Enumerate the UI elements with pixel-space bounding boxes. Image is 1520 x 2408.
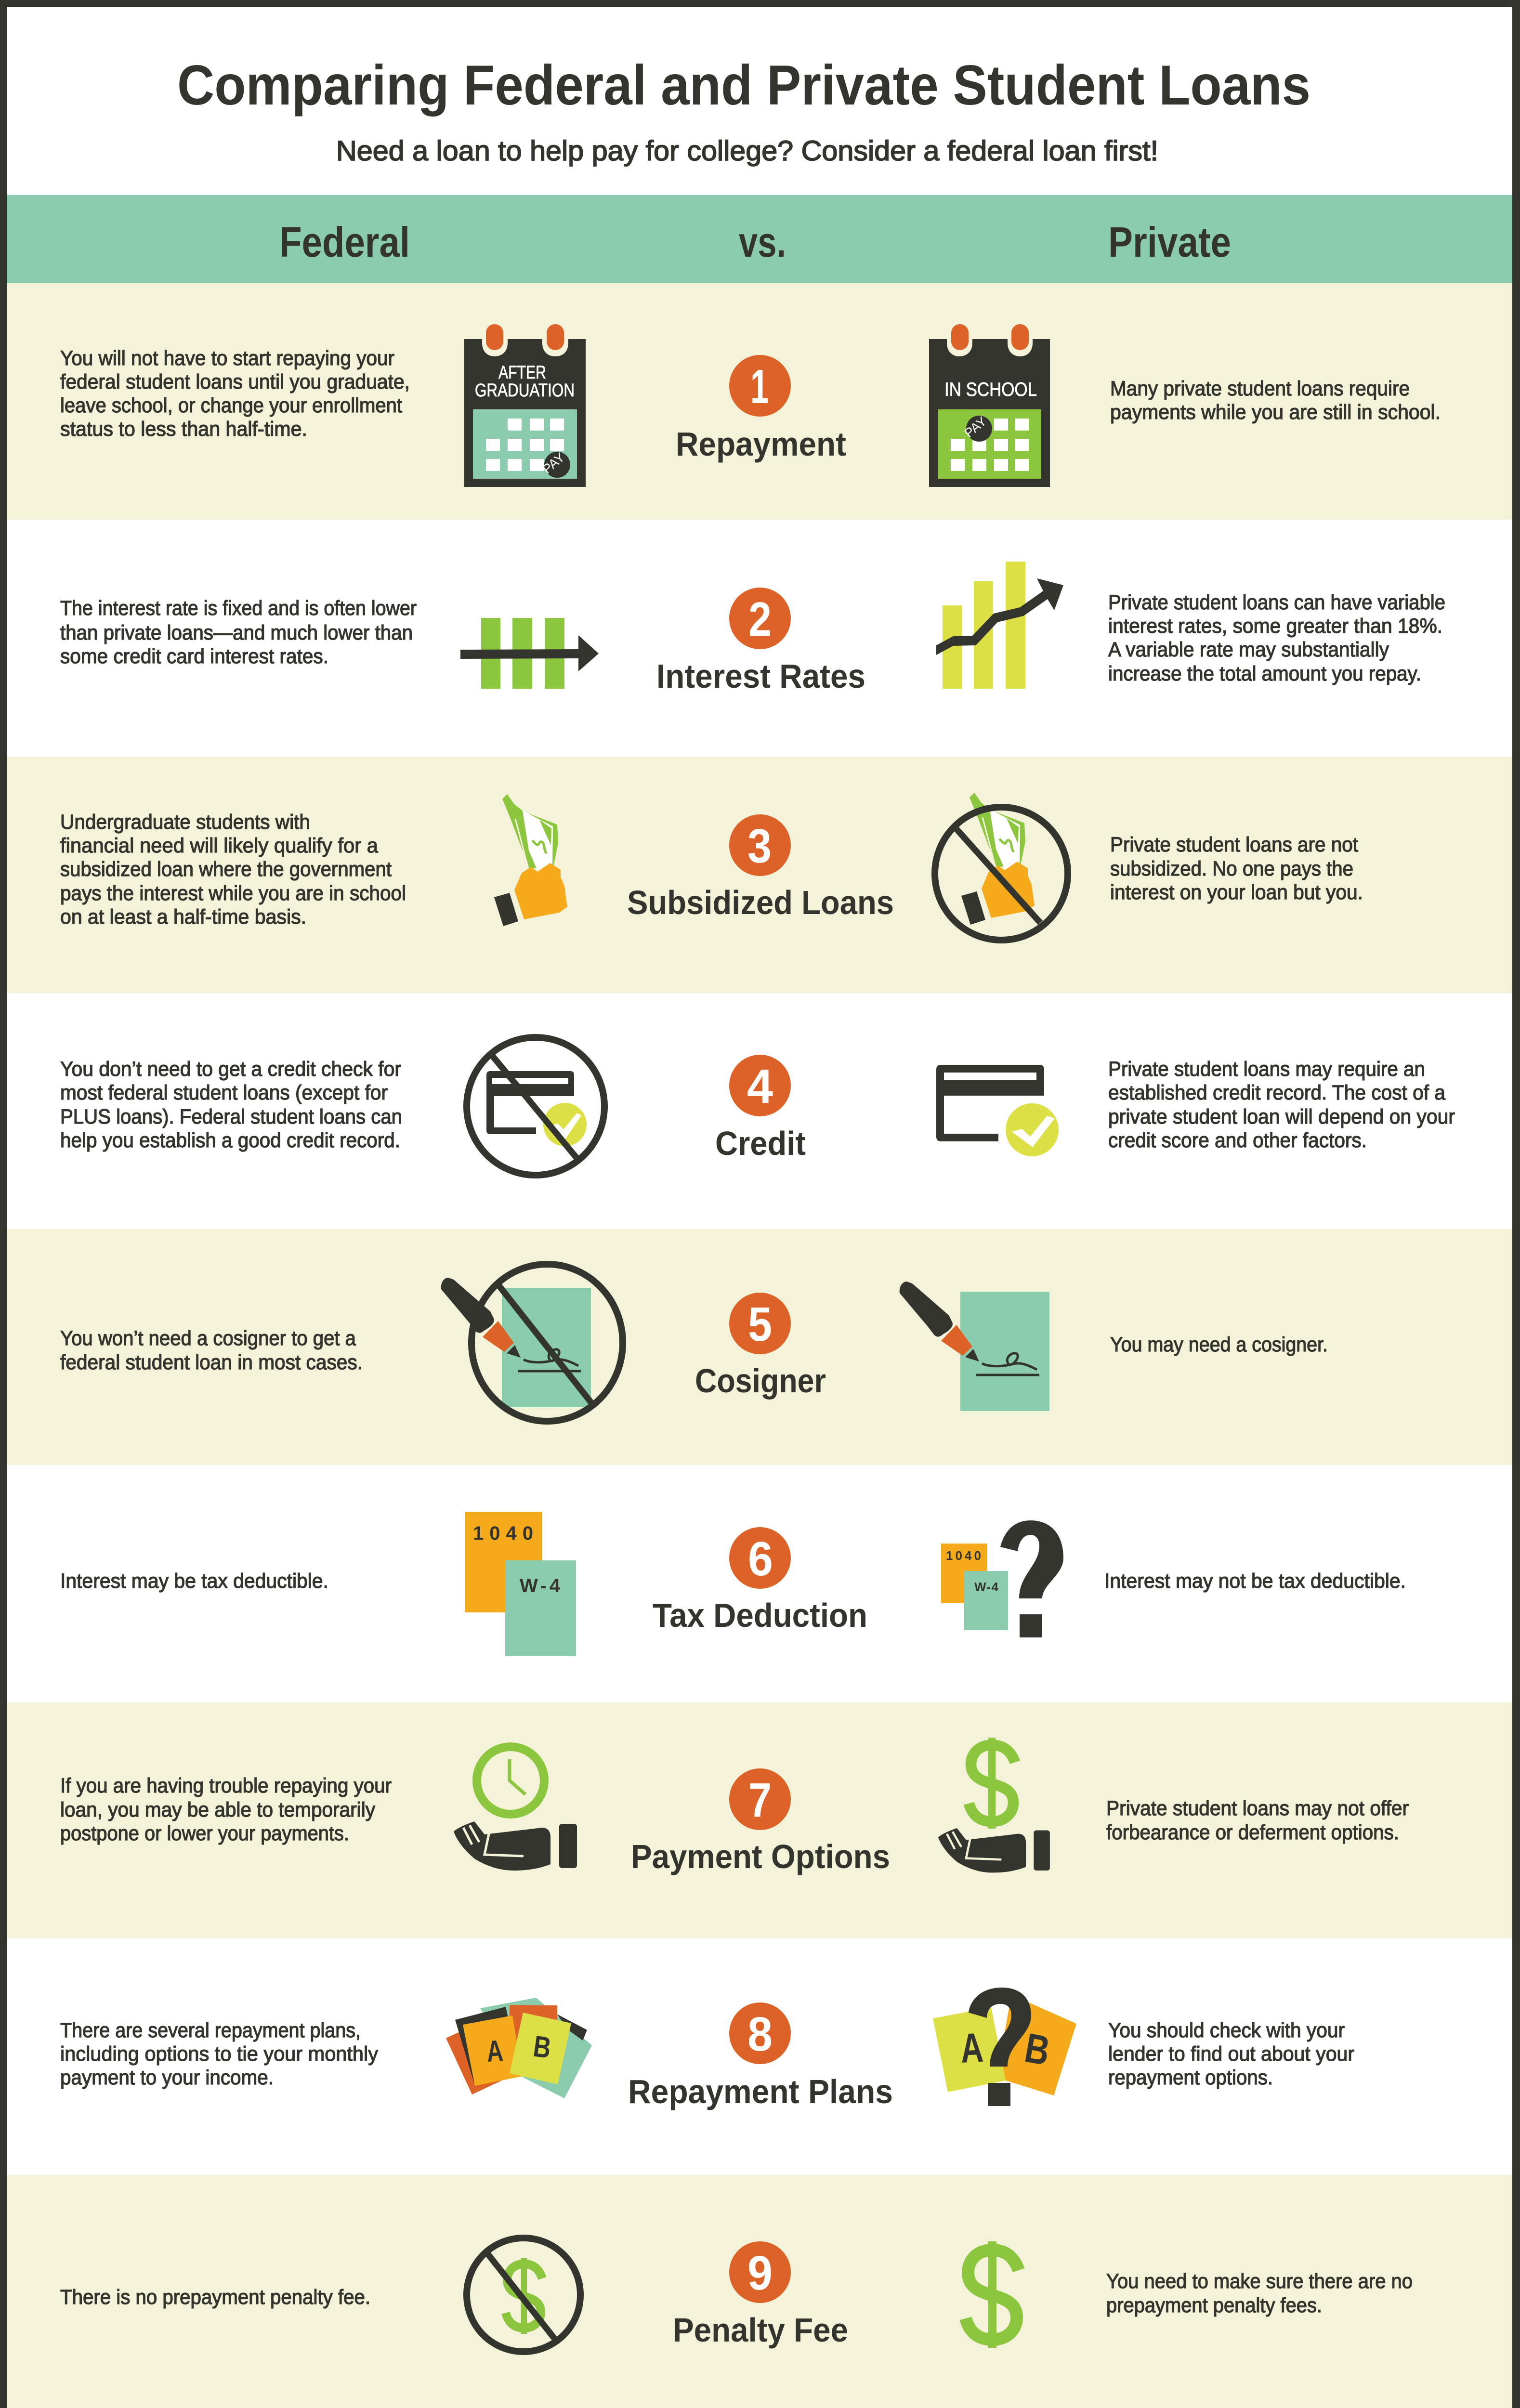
text: federal interest rates: than private loans—and much lower than xyxy=(60,621,413,644)
text: private repayment plans xyxy=(1108,2019,1354,2089)
text: private payment options: forbearance or deferment options. xyxy=(1106,1821,1399,1844)
icon: calendar after graduation: GRADUATION xyxy=(475,380,575,401)
icon: calendar in school: IN SCHOOL xyxy=(944,379,1037,400)
text: private interest rates: increase the total amount you repay. xyxy=(1108,662,1421,685)
text: private repayment plans: repayment options. xyxy=(1108,2066,1273,2089)
text: federal interest rates xyxy=(60,597,417,668)
header band: Federal vs. Private xyxy=(7,195,1512,283)
text: private repayment: payments while you are still in school. xyxy=(1110,401,1441,424)
step number 5: 5 xyxy=(748,1297,772,1351)
text: private repayment: Many private student loans require xyxy=(1110,377,1410,400)
icon: plan cards with question mark: A xyxy=(959,2025,984,2072)
step number 4: 4 xyxy=(747,1060,773,1113)
icon: dollar in hand xyxy=(938,1738,1050,1872)
icon: hand holding money xyxy=(494,794,567,926)
text: federal credit xyxy=(60,1058,402,1152)
label: penalty fee: Penalty Fee xyxy=(673,2311,848,2349)
text: federal credit: most federal student loans (except for xyxy=(60,1081,388,1104)
step number 4 xyxy=(729,1055,791,1116)
text: federal cosigner: You won’t need a cosigner to get a xyxy=(60,1327,356,1350)
text: federal interest rates: some credit card interest rates. xyxy=(60,645,328,668)
subtitle: Need a loan to help pay for college? Consider a federal loan first! xyxy=(336,135,1158,167)
panel: row 1 repayment xyxy=(7,283,1512,520)
title: Comparing Federal and Private Student Loans xyxy=(177,53,1310,117)
icon: rising arrow over bars xyxy=(936,562,1063,689)
text: private penalty fee: prepayment penalty fees. xyxy=(1106,2294,1322,2317)
icon: calendar after graduation xyxy=(464,324,586,487)
text: federal payment options: If you are having trouble repaying your xyxy=(60,1774,392,1797)
icon: prohibited pen signing xyxy=(441,1264,623,1421)
text: federal repayment: leave school, or change your enrollment xyxy=(60,394,402,417)
header band: Federal vs. Private: Federal xyxy=(279,218,410,266)
step number 8: 8 xyxy=(747,2007,773,2061)
text: federal subsidized: pays the interest while you are in school xyxy=(60,882,406,905)
text: private payment options xyxy=(1106,1797,1409,1844)
text: private repayment plans: lender to find out about your xyxy=(1108,2042,1354,2066)
label: subsidized loans: Subsidized Loans xyxy=(627,884,894,921)
text: federal credit: help you establish a good credit record. xyxy=(60,1129,400,1152)
step number 2: 2 xyxy=(748,592,772,646)
step number 8 xyxy=(729,2002,791,2064)
panel: row 9 penalty fee xyxy=(7,2175,1512,2408)
text: federal payment options: postpone or lower your payments. xyxy=(60,1822,349,1845)
text: private repayment xyxy=(1110,377,1441,424)
panel: row 5 cosigner xyxy=(7,1229,1512,1465)
text: federal repayment plans: payment to your income. xyxy=(60,2066,274,2089)
text: private interest rates xyxy=(1108,591,1445,685)
text: federal repayment plans: including options to tie your monthly xyxy=(60,2042,378,2066)
text: private credit: Private student loans may require an xyxy=(1108,1058,1425,1081)
text: federal repayment plans: There are several repayment plans, xyxy=(60,2019,361,2042)
text: federal credit: PLUS loans). Federal student loans can xyxy=(60,1105,402,1128)
text: private credit xyxy=(1108,1058,1455,1152)
icon: tax forms: W-4 xyxy=(520,1575,561,1597)
text: federal repayment plans xyxy=(60,2019,378,2089)
text: private subsidized: interest on your loan but you. xyxy=(1110,881,1363,904)
icon: plan cards with question mark xyxy=(933,1988,1076,2106)
step number 9: 9 xyxy=(747,2246,773,2300)
step number 1: 1 xyxy=(750,360,769,414)
text: private tax: Interest may not be tax deductible. xyxy=(1104,1570,1406,1593)
icon: calendar in school: PAY xyxy=(962,414,989,441)
panel: row 8 repayment plans xyxy=(60,1988,1354,2110)
icon: prohibited credit card xyxy=(467,1037,604,1175)
text: private subsidized: subsidized. No one pays the xyxy=(1110,857,1353,880)
label: repayment plans: Repayment Plans xyxy=(628,2073,893,2110)
panel: row 4 credit xyxy=(60,1037,1455,1175)
icon: tax forms: 1040 xyxy=(473,1523,533,1544)
text: federal credit: You don’t need to get a credit check for xyxy=(60,1058,401,1081)
icon: fanned plan cards A and B xyxy=(446,1998,592,2098)
text: private interest rates: A variable rate may substantially xyxy=(1108,638,1389,661)
text: private cosigner: You may need a cosigner. xyxy=(1110,1333,1328,1356)
text: federal repayment: federal student loans until you graduate, xyxy=(60,370,410,393)
text: private credit: established credit record. The cost of a xyxy=(1108,1081,1445,1104)
label: repayment: Repayment xyxy=(676,425,846,463)
icon: fanned plan cards A and B: A xyxy=(485,2034,504,2068)
step number 5 xyxy=(729,1293,791,1354)
icon: prohibited hand holding money xyxy=(935,793,1068,940)
text: federal penalty fee: There is no prepayment penalty fee. xyxy=(60,2286,370,2309)
label: cosigner: Cosigner xyxy=(695,1362,826,1400)
icon: plan cards with question mark: B xyxy=(1022,2025,1053,2074)
text: private interest rates: Private student loans can have variable xyxy=(1108,591,1445,614)
text: private penalty fee xyxy=(1106,2270,1413,2317)
text: federal tax: Interest may be tax deductible. xyxy=(60,1570,328,1593)
icon: dollar sign xyxy=(966,2241,1019,2348)
icon: calendar after graduation: PAY xyxy=(540,450,567,477)
icon: tax forms with question mark xyxy=(941,1520,1063,1637)
text: private repayment plans: You should check with your xyxy=(1108,2019,1345,2042)
step number 2 xyxy=(729,588,791,649)
icon: tax forms with question mark: W-4 xyxy=(974,1580,999,1594)
panel: row 6 tax deduction xyxy=(60,1512,1406,1656)
text: private credit: credit score and other factors. xyxy=(1108,1129,1367,1152)
text: federal cosigner: federal student loan in most cases. xyxy=(60,1351,363,1374)
panel: row 2 interest rates xyxy=(60,562,1445,695)
step number 3 xyxy=(729,814,791,876)
text: private subsidized: Private student loans are not xyxy=(1110,833,1358,856)
text: federal interest rates: The interest rate is fixed and is often lower xyxy=(60,597,417,620)
text: private subsidized xyxy=(1110,833,1363,904)
label: tax deduction: Tax Deduction xyxy=(653,1597,867,1634)
header band: Federal vs. Private: vs. xyxy=(739,218,786,266)
text: federal subsidized xyxy=(60,811,406,929)
text: federal repayment: status to less than half-time. xyxy=(60,418,307,441)
text: federal repayment: You will not have to start repaying your xyxy=(60,347,394,370)
text: federal repayment xyxy=(60,347,410,441)
text: federal subsidized: on at least a half-time basis. xyxy=(60,905,306,929)
step number 7: 7 xyxy=(748,1773,772,1827)
icon: calendar after graduation: AFTER xyxy=(498,363,546,383)
text: private credit: private student loan will depend on your xyxy=(1108,1105,1455,1128)
icon: tax forms with question mark: 1040 xyxy=(946,1548,981,1563)
icon: fanned plan cards A and B: B xyxy=(531,2030,553,2065)
step number 3: 3 xyxy=(747,819,772,873)
icon: pen signing xyxy=(900,1282,1049,1411)
text: private penalty fee: You need to make sure there are no xyxy=(1106,2270,1413,2293)
label: payment options: Payment Options xyxy=(631,1838,890,1875)
text: federal subsidized: financial need will likely qualify for a xyxy=(60,834,378,857)
step number 1 xyxy=(729,355,791,417)
step number 6: 6 xyxy=(748,1532,773,1586)
text: private payment options: Private student loans may not offer xyxy=(1106,1797,1409,1820)
icon: clock in hand xyxy=(454,1747,577,1871)
text: federal cosigner xyxy=(60,1327,363,1374)
panel: row 3 subsidized loans xyxy=(7,757,1512,993)
text: private interest rates: interest rates, some greater than 18%. xyxy=(1108,615,1442,638)
header band: Federal vs. Private: Private xyxy=(1108,218,1231,266)
panel: row 7 payment options xyxy=(7,1702,1512,1938)
label: interest rates: Interest Rates xyxy=(656,657,865,695)
text: federal subsidized: subsidized loan where the government xyxy=(60,858,392,881)
icon: credit card with check xyxy=(936,1065,1059,1156)
icon: flat arrow through bars xyxy=(460,618,599,689)
text: federal subsidized: Undergraduate students with xyxy=(60,811,310,834)
step number 6 xyxy=(729,1527,791,1589)
icon: prohibited dollar xyxy=(467,2238,580,2352)
label: credit: Credit xyxy=(715,1125,806,1162)
icon: calendar in school xyxy=(929,324,1050,487)
step number 7 xyxy=(729,1768,791,1830)
text: federal payment options: loan, you may be able to temporarily xyxy=(60,1798,375,1821)
step number 9 xyxy=(729,2241,791,2303)
icon: tax forms xyxy=(465,1512,576,1656)
text: federal payment options xyxy=(60,1774,392,1845)
